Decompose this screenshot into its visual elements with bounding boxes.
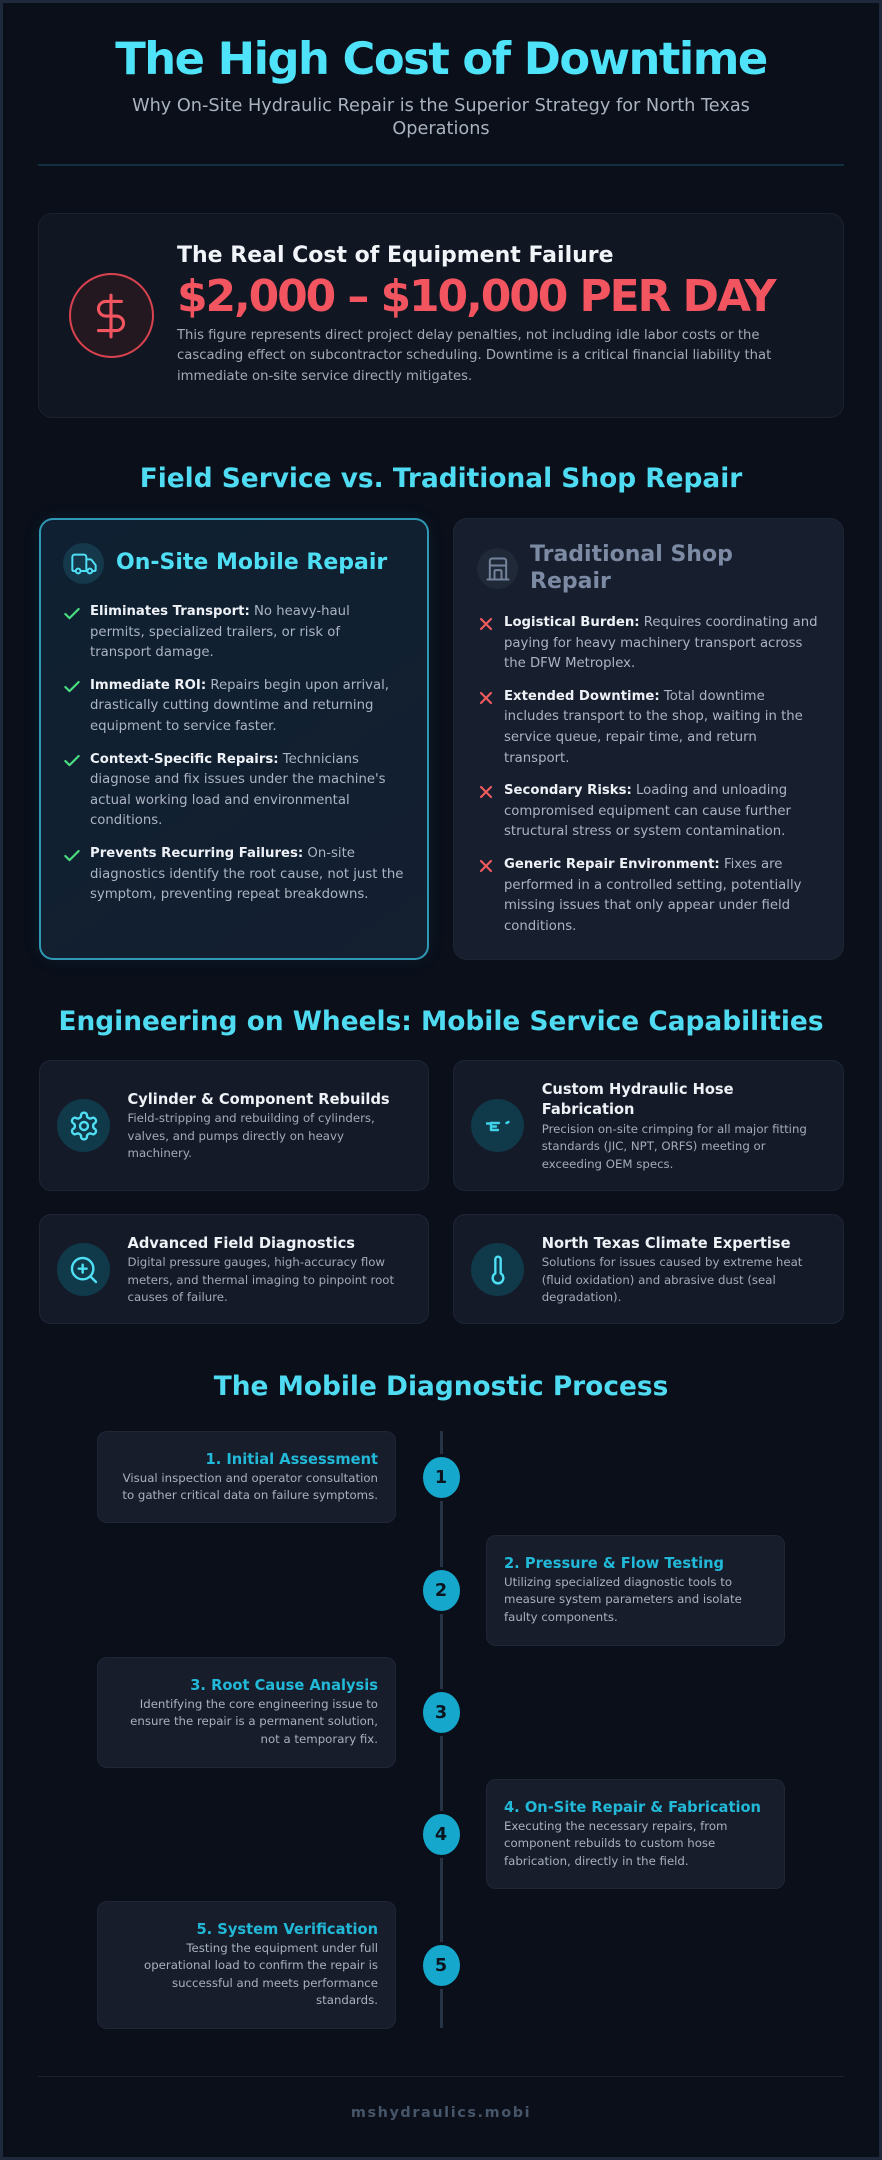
step 1 marker xyxy=(420,1454,462,1500)
subtitle: Operations xyxy=(392,119,490,139)
step 3 card: Identifying the core engineering issue to xyxy=(140,1697,378,1711)
step 2 marker xyxy=(420,1566,462,1614)
panel: on-site mobile repair xyxy=(39,518,429,960)
step 4 card: 4. On-Site Repair & Fabrication xyxy=(504,1799,761,1816)
benefits list: Eliminates Transport: No heavy-haul xyxy=(90,604,350,619)
drawbacks list: Secondary Risks: Loading and unloading xyxy=(504,783,787,798)
text: field diagnostics: causes of failure. xyxy=(128,1290,228,1304)
step 5 card: 5. System Verification xyxy=(196,1921,378,1938)
drawbacks list: compromised equipment can cause further xyxy=(504,804,791,819)
benefits list: conditions. xyxy=(90,813,162,828)
text: hose fabrication: standards (JIC, NPT, ORFS) meeting or xyxy=(542,1139,766,1153)
step 5 marker xyxy=(420,1942,462,1988)
step 1 marker: 1 xyxy=(435,1468,447,1488)
step 4 card xyxy=(486,1779,785,1889)
drawbacks list: the DFW Metroplex. xyxy=(504,656,635,671)
benefits list xyxy=(64,604,403,902)
big figure: $2,000 – $10,000 PER DAY xyxy=(177,271,774,322)
step 5 card: successful and meets performance xyxy=(172,1976,378,1990)
panel: climate expertise xyxy=(453,1214,844,1324)
title: The High Cost of Downtime xyxy=(115,32,767,85)
subtitle xyxy=(132,96,750,139)
step 3 card: ensure the repair is a permanent solution, xyxy=(130,1714,378,1728)
heading: comparison section: Field Service vs. Traditional Shop Repair xyxy=(140,463,742,494)
text: hose fabrication: Precision on-site crimping for all major fitting xyxy=(542,1122,807,1136)
description: This figure represents direct project delay penalties, not including idle labor costs or the xyxy=(177,328,760,343)
step 2 marker: 2 xyxy=(435,1580,447,1600)
text: hose fabrication: exceeding OEM specs. xyxy=(542,1157,673,1171)
drawbacks list xyxy=(480,615,818,934)
benefits list: transport damage. xyxy=(90,645,214,660)
benefits list: Prevents Recurring Failures: On-site xyxy=(90,846,355,861)
text: climate expertise: degradation). xyxy=(542,1290,621,1304)
step 4 card: component rebuilds to custom hose xyxy=(504,1836,715,1850)
icon: magnifier xyxy=(57,1243,110,1296)
panel: field diagnostics xyxy=(39,1214,429,1324)
drawbacks list: paying for heavy machinery transport across xyxy=(504,636,802,651)
text: field diagnostics: Digital pressure gauges, high-accuracy flow xyxy=(128,1255,385,1269)
benefits list: symptom, preventing repeat breakdowns. xyxy=(90,887,368,902)
text: cylinder rebuilds: machinery. xyxy=(128,1146,192,1160)
text: cylinder rebuilds xyxy=(128,1091,390,1160)
benefits list: diagnose and fix issues under the machine's xyxy=(90,772,386,787)
step 5 marker: 5 xyxy=(435,1956,447,1976)
description xyxy=(176,328,771,384)
drawbacks list: structural stress or system contamination. xyxy=(504,824,785,839)
heading: on-site: On-Site Mobile Repair xyxy=(116,550,387,575)
drawbacks list: transport. xyxy=(504,751,569,766)
text: field diagnostics xyxy=(128,1235,394,1304)
panel: hose fabrication xyxy=(453,1060,844,1191)
icon: truck xyxy=(63,543,104,584)
step 1 card xyxy=(97,1431,396,1523)
step 2 card: faulty components. xyxy=(504,1610,618,1624)
step 5 card: Testing the equipment under full xyxy=(186,1941,378,1955)
step 3 card xyxy=(97,1657,396,1768)
step 2 card: measure system parameters and isolate xyxy=(504,1592,742,1606)
text: field diagnostics: Advanced Field Diagnostics xyxy=(128,1235,355,1252)
step 3 card: not a temporary fix. xyxy=(261,1732,378,1746)
benefits list: actual working load and environmental xyxy=(90,793,350,808)
drawbacks list: Extended Downtime: Total downtime xyxy=(504,689,765,704)
text: climate expertise xyxy=(542,1235,802,1304)
step 2 card xyxy=(486,1535,785,1646)
text: hose fabrication xyxy=(542,1081,807,1171)
heading: capabilities section: Engineering on Wheels: Mobile Service Capabilities xyxy=(58,1006,824,1037)
step 3 marker xyxy=(420,1688,462,1736)
icon: thermometer xyxy=(471,1243,524,1296)
icon: dollar sign xyxy=(68,273,154,358)
panel: real cost of equipment failure xyxy=(38,213,844,418)
panel: cylinder rebuilds xyxy=(39,1060,429,1191)
step 1 card: to gather critical data on failure symptoms. xyxy=(122,1488,378,1502)
drawbacks list: service queue, repair time, and return xyxy=(504,730,757,745)
footer website: mshydraulics.mobi xyxy=(351,2105,531,2121)
drawbacks list: missing issues that only appear under field xyxy=(504,898,790,913)
drawbacks list: performed in a controlled setting, potentially xyxy=(504,878,802,893)
heading: real cost: The Real Cost of Equipment Failure xyxy=(177,243,614,268)
step 3 card: 3. Root Cause Analysis xyxy=(190,1677,378,1694)
icon: hose fitting xyxy=(471,1099,524,1152)
timeline: diagnostic process xyxy=(97,1431,785,2029)
text: cylinder rebuilds: Cylinder & Component Rebuilds xyxy=(128,1091,390,1108)
step 3 marker: 3 xyxy=(435,1702,447,1722)
benefits list: drastically cutting downtime and returning xyxy=(90,698,373,713)
heading: process section: The Mobile Diagnostic Process xyxy=(214,1370,668,1402)
text: cylinder rebuilds: valves, and pumps directly on heavy xyxy=(128,1129,344,1143)
step 4 marker xyxy=(420,1810,462,1858)
drawbacks list: conditions. xyxy=(504,919,576,934)
step 2 card: Utilizing specialized diagnostic tools to xyxy=(504,1575,732,1589)
text: climate expertise: North Texas Climate Expertise xyxy=(542,1235,791,1252)
drawbacks list: Generic Repair Environment: Fixes are xyxy=(504,857,782,872)
step 5 card: standards. xyxy=(316,1993,378,2007)
benefits list: permits, specialized trailers, or risk of xyxy=(90,625,340,640)
text: climate expertise: Solutions for issues caused by extreme heat xyxy=(542,1255,802,1269)
step 1 card: Visual inspection and operator consultation xyxy=(123,1471,378,1485)
drawbacks list: Logistical Burden: Requires coordinating and xyxy=(504,615,818,630)
text: cylinder rebuilds: Field-stripping and rebuilding of cylinders, xyxy=(128,1111,375,1125)
benefits list: Immediate ROI: Repairs begin upon arrival, xyxy=(90,678,389,693)
step 5 card xyxy=(97,1901,396,2029)
text: climate expertise: (fluid oxidation) and abrasive dust (seal xyxy=(542,1273,776,1287)
benefits list: diagnostics identify the root cause, not just the xyxy=(90,867,403,882)
step 4 marker: 4 xyxy=(435,1824,447,1844)
text: hose fabrication: Fabrication xyxy=(542,1101,634,1118)
text: field diagnostics: meters, and thermal imaging to pinpoint root xyxy=(128,1273,394,1287)
icon: shop building xyxy=(477,548,518,589)
drawbacks list: includes transport to the shop, waiting in the xyxy=(504,709,803,724)
panel: traditional shop repair xyxy=(453,518,844,960)
step 1 card: 1. Initial Assessment xyxy=(206,1451,378,1468)
description: cascading effect on subcontractor scheduling. Downtime is a critical financial liability that xyxy=(177,348,771,363)
heading: traditional xyxy=(530,542,733,594)
text: hose fabrication: Custom Hydraulic Hose xyxy=(542,1081,734,1098)
heading: traditional: Traditional Shop xyxy=(530,542,733,566)
benefits list: equipment to service faster. xyxy=(90,719,277,734)
step 5 card: operational load to confirm the repair is xyxy=(144,1958,378,1972)
icon: gear xyxy=(57,1099,110,1152)
subtitle: Why On-Site Hydraulic Repair is the Superior Strategy for North Texas xyxy=(132,96,750,116)
benefits list: Context-Specific Repairs: Technicians xyxy=(90,752,359,767)
step 2 card: 2. Pressure & Flow Testing xyxy=(504,1555,724,1572)
heading: traditional: Repair xyxy=(530,568,611,594)
step 4 card: Executing the necessary repairs, from xyxy=(504,1819,728,1833)
step 4 card: fabrication, directly in the field. xyxy=(504,1854,689,1868)
description: immediate on-site service directly mitigates. xyxy=(177,369,472,384)
